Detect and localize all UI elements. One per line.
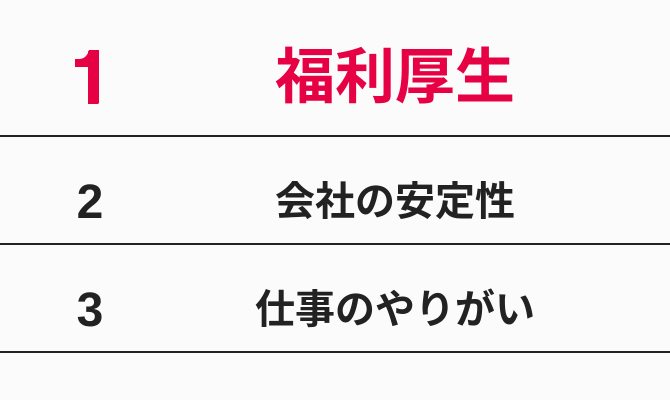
rank number 2: 2: [77, 176, 103, 229]
rank number 3: 3: [77, 284, 103, 337]
label: company stability: 会社の安定性: [275, 180, 515, 224]
rank row 3: [0, 284, 670, 353]
rank number 1: [75, 50, 99, 104]
label: welfare: 福利厚生: [275, 44, 515, 111]
label: job satisfaction: 仕事のやりがい: [255, 288, 535, 332]
row divider 1: [0, 135, 670, 137]
rank number 1: 1: [71, 33, 114, 121]
row divider 2: [0, 243, 670, 245]
rank row 1: [0, 44, 670, 137]
rank row 2: [0, 176, 670, 245]
row divider 3: [0, 351, 670, 353]
